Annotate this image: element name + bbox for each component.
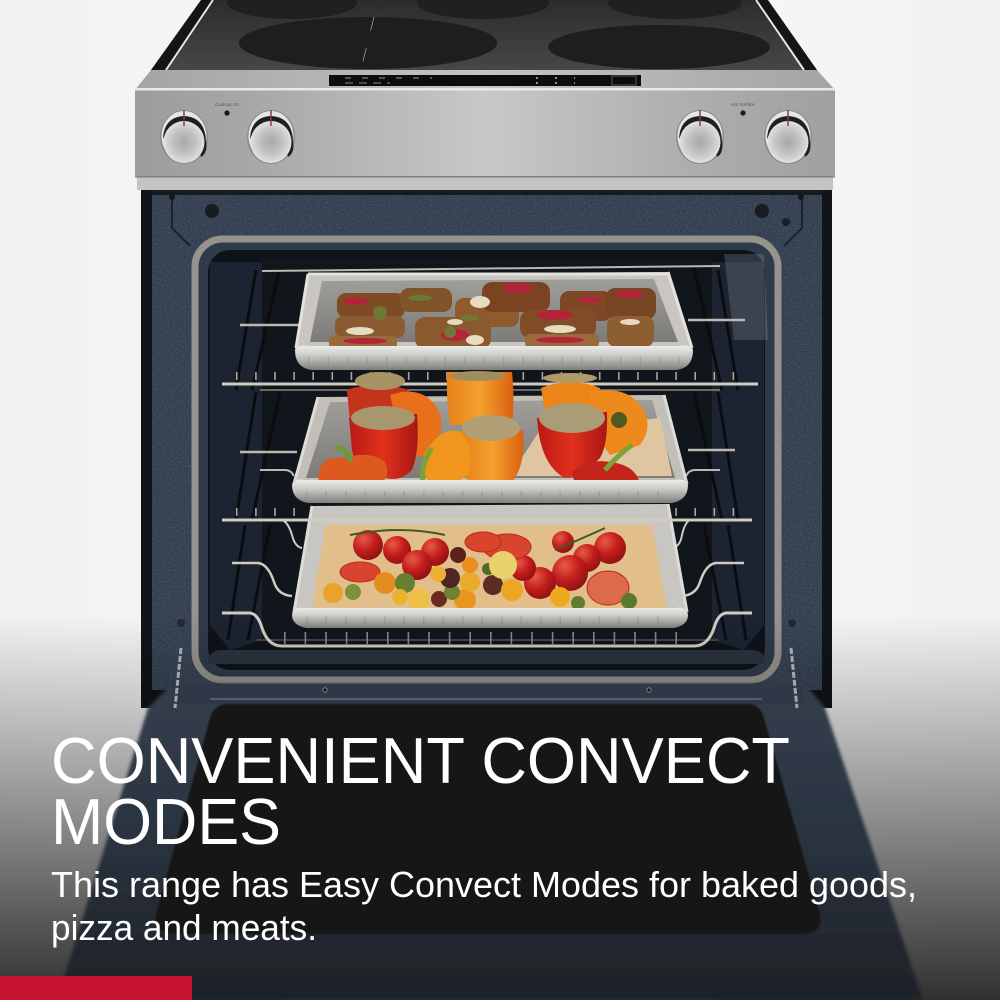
title: CONVENIENT CONVECT [51, 724, 790, 797]
door gasket [195, 239, 778, 680]
red accent bar [0, 976, 192, 1000]
side pepper [423, 431, 471, 485]
description: pizza and meats. [51, 907, 317, 948]
rear rack wires [240, 266, 745, 476]
bruschetta toasts [329, 282, 656, 351]
burner: rear right [608, 0, 742, 19]
door hinges [175, 648, 797, 708]
tray: stuffed peppers [292, 371, 688, 503]
oven frame [141, 190, 832, 708]
title [51, 724, 790, 858]
open oven door [57, 684, 923, 1000]
oven cavity [196, 240, 777, 679]
door screws [323, 688, 651, 692]
description: This range has Easy Convect Modes for baked goods, [51, 864, 917, 905]
knob 2 [247, 110, 295, 164]
rear peppers [347, 371, 648, 458]
front peppers [318, 403, 640, 485]
knob 4 [764, 110, 812, 164]
knob 3 [676, 110, 724, 164]
middle rack front [222, 512, 752, 548]
door window [155, 704, 821, 934]
description [51, 864, 917, 948]
small mixed tomatoes [323, 547, 637, 611]
control panel [135, 70, 835, 190]
bottom rack [222, 563, 752, 646]
cherry tomatoes [353, 530, 626, 599]
indicator label: hot surface: Hot Surface [731, 102, 755, 107]
cooktop [151, 0, 817, 70]
tomato halves [340, 532, 629, 605]
top rack front [222, 376, 758, 384]
indicator label: cooktop on: Cooktop On [215, 102, 240, 107]
knob 1 [160, 110, 208, 164]
burner: front right [548, 25, 770, 69]
tray: roasted tomatoes [292, 504, 688, 628]
control display [329, 75, 641, 86]
side pepper right [572, 461, 640, 484]
burner: rear left [227, 0, 357, 19]
vine stems [350, 528, 605, 550]
dark gradient overlay [0, 615, 1000, 1000]
burner: rear centre [417, 0, 549, 19]
tray: bruschetta [295, 272, 693, 370]
title: MODES [51, 785, 281, 858]
front middle rack wire over tomato tray [222, 518, 752, 522]
burner: front left [239, 17, 497, 69]
indicator lights [224, 110, 746, 116]
side pepper left [318, 455, 387, 485]
